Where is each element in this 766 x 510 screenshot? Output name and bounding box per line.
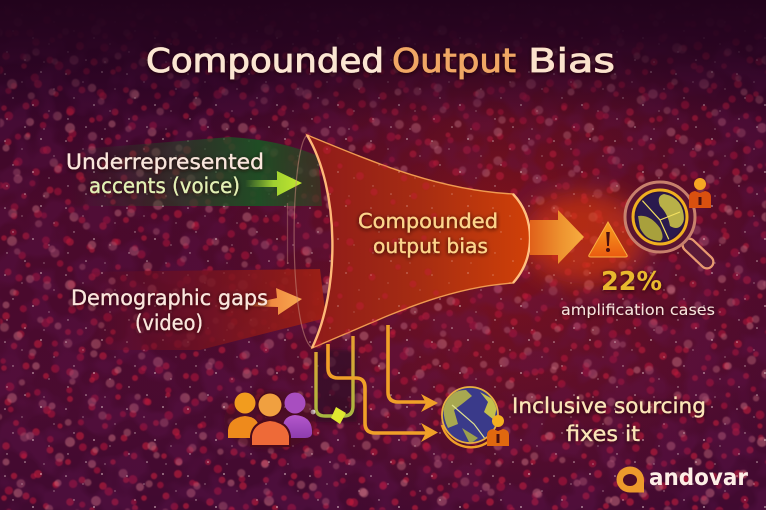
title xyxy=(146,41,615,80)
arrowhead upper xyxy=(421,394,438,412)
output glow xyxy=(523,192,647,284)
title: Output xyxy=(392,41,516,80)
text: inclusive sourcing: fixes it xyxy=(566,422,640,446)
arrow: green voice input xyxy=(245,171,302,196)
logo: andovar: andovar xyxy=(649,465,749,491)
icon: globe with person xyxy=(442,387,509,447)
title: Bias xyxy=(528,41,615,80)
input label: demographic gaps: Demographic gaps xyxy=(71,286,268,310)
white node xyxy=(311,410,315,414)
input stream: underrepresented accents xyxy=(70,137,322,206)
statistic: 22% xyxy=(601,267,662,297)
dark panel behind pipes xyxy=(315,350,357,422)
pipe: green feedback loop xyxy=(316,336,353,424)
icon: person badge, magnifier xyxy=(689,178,711,208)
funnel back rim xyxy=(288,135,312,348)
output arrow xyxy=(530,210,584,264)
input label: underrepresented accents: Underrepresented xyxy=(66,150,264,174)
input label: demographic gaps: (video) xyxy=(135,311,203,335)
funnel label xyxy=(358,209,498,258)
marker: green diamond xyxy=(331,407,346,424)
statistic xyxy=(561,267,715,319)
arrowhead lower xyxy=(421,423,438,442)
icon: magnifying glass with globe xyxy=(625,182,707,262)
input label: demographic gaps xyxy=(71,286,268,335)
person badge, globe xyxy=(487,415,509,446)
text: inclusive sourcing xyxy=(512,394,706,446)
funnel label: Compounded xyxy=(358,209,498,233)
icon: warning triangle xyxy=(589,222,627,257)
funnel xyxy=(300,130,535,355)
title: Compounded xyxy=(146,41,384,80)
text: inclusive sourcing: Inclusive sourcing xyxy=(512,394,706,418)
input stream: demographic gaps xyxy=(80,269,326,350)
pipe: to globe upper xyxy=(388,325,438,412)
logo: andovar xyxy=(616,465,749,492)
arrow: orange video input xyxy=(240,288,302,315)
pipe: to globe lower xyxy=(328,344,438,442)
statistic caption: amplification cases xyxy=(561,301,715,319)
funnel label: output bias xyxy=(373,234,488,258)
input label: underrepresented accents xyxy=(66,150,264,198)
icon: group of people xyxy=(224,390,316,450)
input label: underrepresented accents: accents (voice) xyxy=(89,174,240,198)
